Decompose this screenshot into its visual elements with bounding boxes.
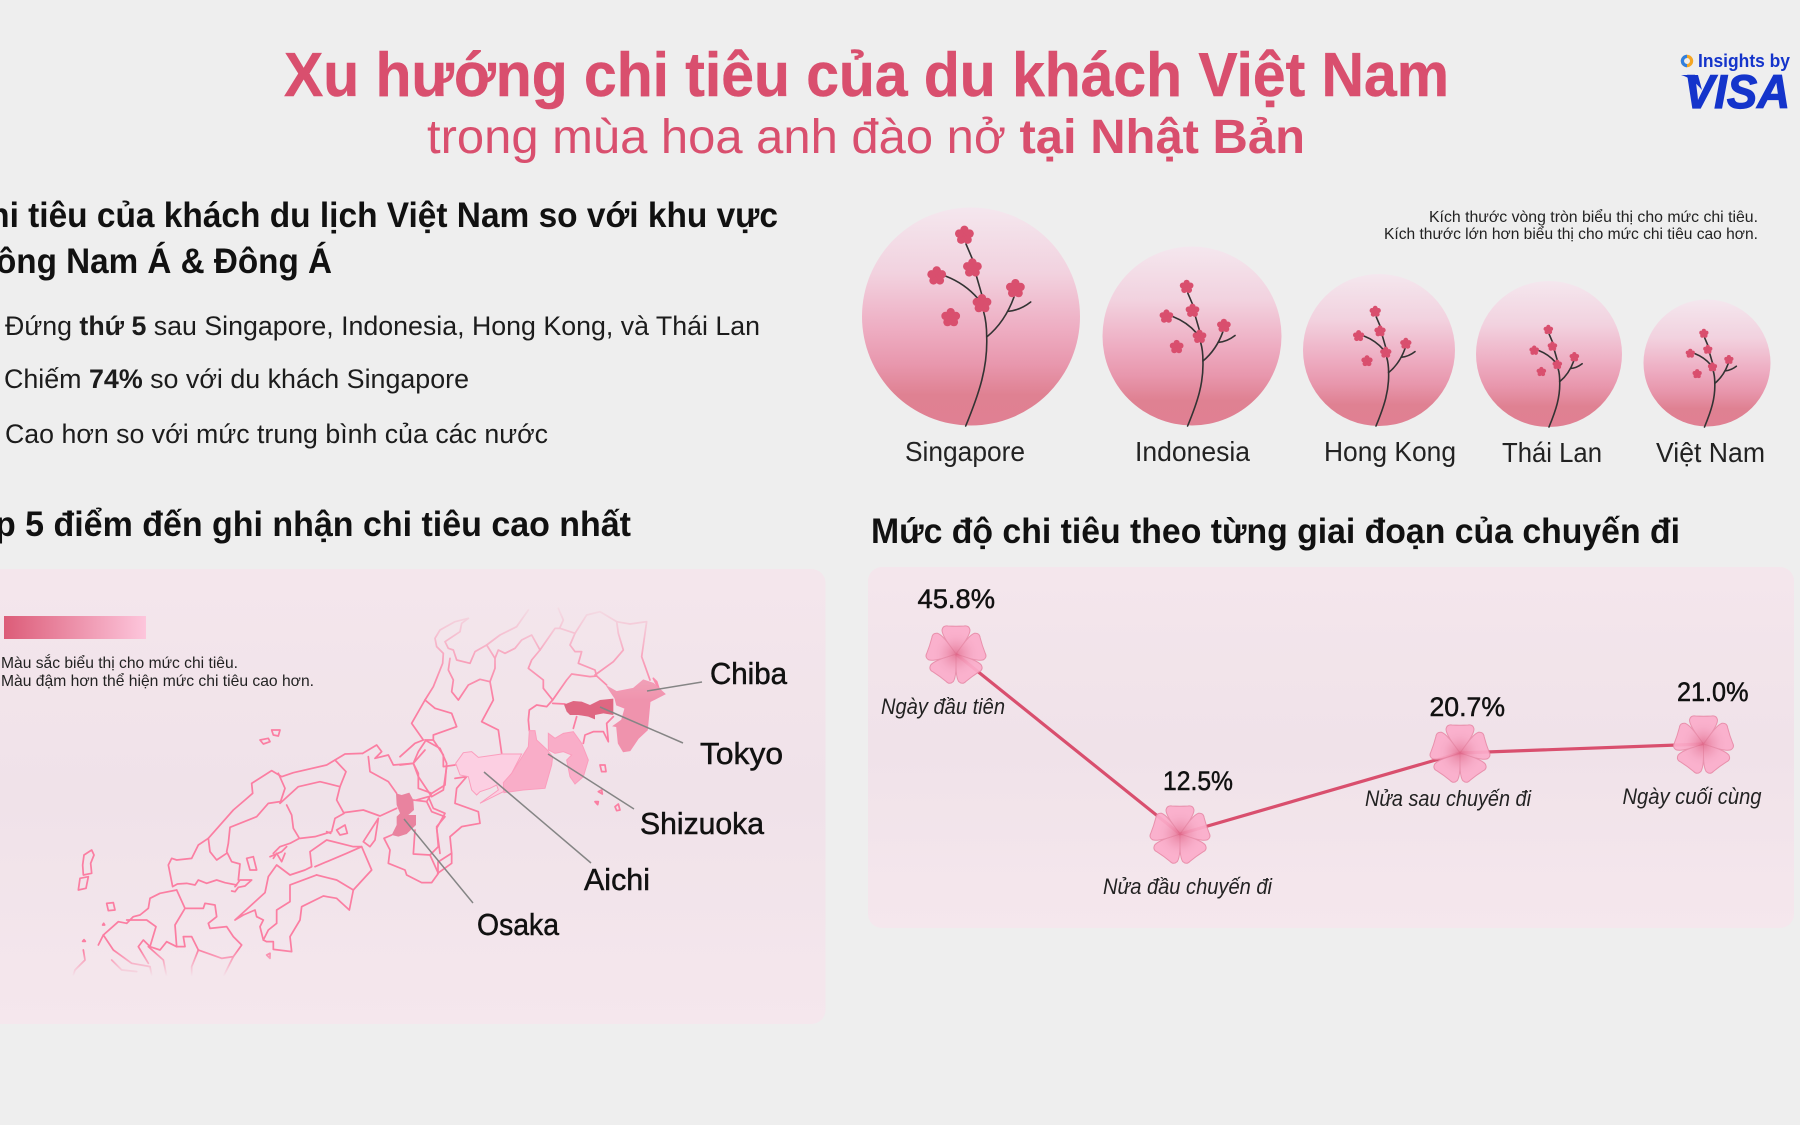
circle: Singapore bbox=[862, 208, 1080, 467]
map labels: Shizuoka bbox=[640, 806, 765, 841]
region: Osaka bbox=[392, 793, 416, 837]
value labels: 12.5% bbox=[1163, 766, 1233, 796]
map outlines: western Japan bbox=[73, 730, 447, 977]
region: Chiba bbox=[607, 680, 665, 752]
circle: Singapore: Singapore bbox=[905, 436, 1025, 467]
leader lines bbox=[404, 682, 702, 903]
map labels: Tokyo bbox=[700, 736, 783, 771]
circle: Việt Nam bbox=[1644, 300, 1770, 468]
map labels bbox=[477, 656, 788, 942]
value labels bbox=[918, 584, 1748, 796]
map legend: Màu đậm hơn thể hiện mức chi tiêu cao hơn. bbox=[1, 672, 314, 690]
blossom markers bbox=[925, 626, 1735, 865]
note: circle size legend: Kích thước lớn hơn biểu thị cho mức chi tiêu cao hơn. bbox=[1384, 225, 1758, 243]
bullet list: Chiếm 74% so với du khách Singapore bbox=[4, 364, 469, 394]
logo: Insights by Visa: VISA bbox=[1684, 65, 1790, 118]
note: circle size legend: Kích thước vòng tròn biểu thị cho mức chi tiêu. bbox=[1429, 208, 1758, 226]
line chart bbox=[956, 654, 1704, 834]
bullet list: Cao hơn so với mức trung bình của các nước bbox=[5, 419, 548, 449]
map legend: Màu sắc biểu thị cho mức chi tiêu. bbox=[1, 653, 238, 672]
value labels: 45.8% bbox=[918, 584, 995, 614]
bullet list: Đứng thứ 5 sau Singapore, Indonesia, Hong Kong, và Thái Lan bbox=[5, 311, 760, 341]
circle: Hong Kong bbox=[1303, 274, 1456, 467]
region: Shizuoka bbox=[503, 731, 553, 793]
stage labels: Nửa sau chuyến đi bbox=[1365, 786, 1532, 811]
circle: Thái Lan bbox=[1476, 281, 1622, 468]
note: circle size legend bbox=[1384, 208, 1758, 243]
value labels: 21.0% bbox=[1677, 677, 1748, 707]
circle: Việt Nam: Việt Nam bbox=[1656, 437, 1765, 468]
circle: Indonesia: Indonesia bbox=[1135, 436, 1250, 467]
circle: Thái Lan: Thái Lan bbox=[1502, 437, 1602, 468]
panel: Japan map bbox=[0, 569, 826, 1024]
map of Japan prefectures bbox=[73, 608, 665, 977]
title: trong mùa hoa anh đào nở tại Nhật Bản bbox=[427, 111, 1305, 164]
circle: Hong Kong: Hong Kong bbox=[1324, 436, 1456, 467]
map legend bbox=[1, 616, 314, 690]
heading: spending by trip stage: Mức độ chi tiêu theo từng giai đoạn của chuyến đi bbox=[871, 512, 1680, 551]
map labels: Chiba bbox=[710, 656, 788, 691]
stage labels: Ngày cuối cùng bbox=[1622, 784, 1762, 809]
title bbox=[284, 41, 1449, 164]
panel: country spending circles bbox=[862, 208, 1770, 468]
stage labels bbox=[881, 694, 1762, 899]
stage labels: Ngày đầu tiên bbox=[881, 694, 1005, 719]
value labels: 20.7% bbox=[1430, 692, 1505, 722]
panel: trip stage line chart bbox=[868, 567, 1794, 928]
region: Tokyo bbox=[564, 699, 613, 719]
region: Shizuoka peninsula bbox=[548, 732, 588, 784]
map labels: Osaka bbox=[477, 907, 560, 942]
map outlines: central and eastern Japan bbox=[400, 608, 659, 873]
region: Aichi bbox=[456, 752, 522, 803]
stage labels: Nửa đầu chuyến đi bbox=[1103, 874, 1273, 899]
map lower Mie coast bbox=[438, 853, 452, 873]
logo: Insights by Visa: Insights by bbox=[1698, 51, 1790, 71]
circle: Indonesia bbox=[1102, 246, 1282, 467]
heading: regional comparison bbox=[0, 196, 778, 281]
title: Xu hướng chi tiêu của du khách Việt Nam bbox=[284, 41, 1449, 110]
bullet list bbox=[4, 311, 760, 449]
map labels: Aichi bbox=[584, 862, 650, 897]
